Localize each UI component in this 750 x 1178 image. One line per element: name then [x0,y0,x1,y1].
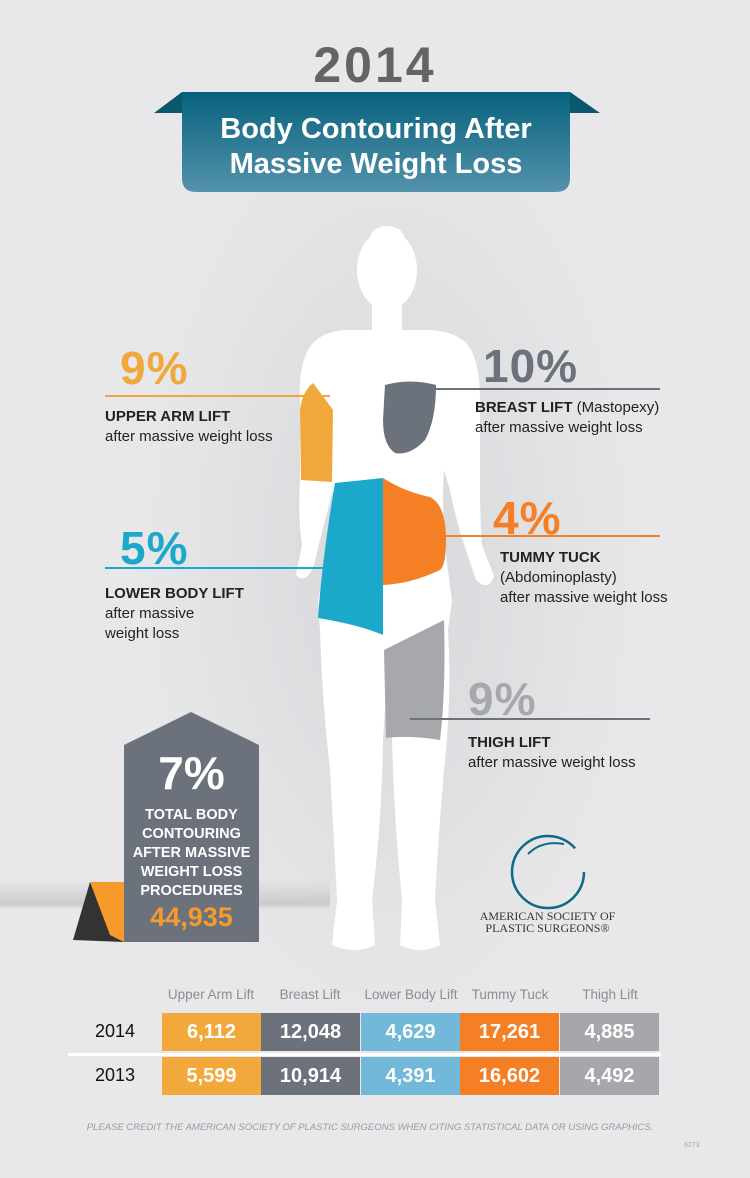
text: UPPER ARM LIFT [105,408,230,425]
total callout: WEIGHT LOSS [141,864,242,880]
title banner [154,92,600,192]
code number: 6273 [684,1142,700,1149]
total callout [73,712,259,942]
logo [480,834,615,935]
stat: lower body: 5% [120,522,188,574]
logo: AMERICAN SOCIETY OF [480,909,615,923]
text: LOWER BODY LIFT [105,585,244,602]
total callout: PROCEDURES [140,883,243,899]
stat: breast: 10% [483,340,578,392]
text: TUMMY TUCK [500,549,601,566]
data table: Thigh Lift [582,987,638,1002]
total callout: 44,935 [150,902,233,932]
stat: upper arm: 9% [120,342,188,394]
text: after massive weight loss [500,589,668,606]
data table: 17,261 [479,1021,540,1043]
tummy highlight [383,478,446,585]
total callout: 7% [158,747,225,799]
data table: 4,885 [584,1021,635,1043]
data table: Tummy Tuck [472,987,548,1002]
stat: tummy tuck: 4% [493,492,561,544]
total callout: CONTOURING [142,826,241,842]
title year: 2014 [313,37,437,93]
data table: Upper Arm Lift [168,987,254,1002]
breast highlight [383,382,436,453]
text: after massive weight loss [105,428,273,445]
logo: PLASTIC SURGEONS® [485,921,610,935]
banner heading [220,113,532,180]
data table: 2013 [95,1065,135,1085]
stat: thigh: 9% [468,673,536,725]
data table: Lower Body Lift [364,987,458,1002]
data table: 5,599 [186,1065,237,1087]
text: (Abdominoplasty) [500,569,617,586]
footer credit: PLEASE CREDIT THE AMERICAN SOCIETY OF PLASTIC SURGEONS WHEN CITING STATISTICAL DATA OR USING GRAPHICS. [87,1122,653,1133]
text: after massive weight loss [468,754,636,771]
data table: Breast Lift [280,987,340,1002]
data table: 4,492 [584,1065,635,1087]
data table: 4,391 [385,1065,436,1087]
floor shadow [0,880,330,910]
data table [68,987,661,1095]
lower body highlight [318,478,383,635]
data table: 12,048 [280,1021,341,1043]
text: BREAST LIFT (Mastopexy) [475,399,659,416]
upper arm highlight [300,383,333,482]
text: THIGH LIFT [468,734,550,751]
banner heading: Body Contouring After [220,113,532,145]
data table: 10,914 [280,1065,341,1087]
data table: 2014 [95,1021,135,1041]
thigh highlight [384,620,444,740]
text: after massive [105,605,194,622]
text: after massive weight loss [475,419,643,436]
text: weight loss [105,625,179,642]
data table: 16,602 [479,1065,540,1087]
total callout: TOTAL BODY [145,807,238,823]
data table: 6,112 [187,1021,236,1043]
total callout: AFTER MASSIVE [133,845,250,861]
data table: 4,629 [385,1021,436,1043]
banner heading: Massive Weight Loss [230,148,522,180]
